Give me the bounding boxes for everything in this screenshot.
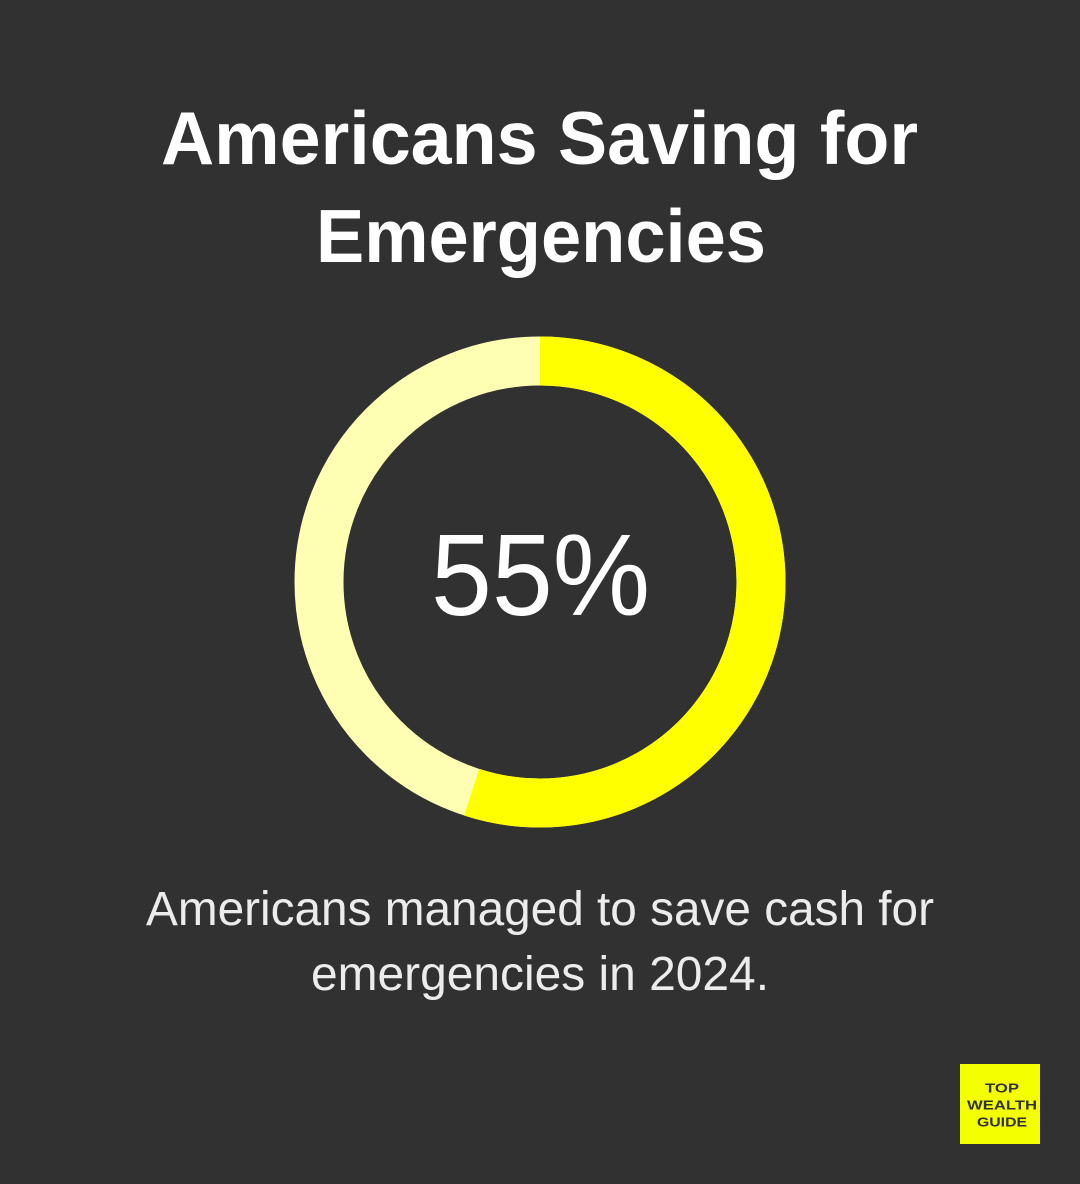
caption bbox=[146, 883, 934, 1001]
donut chart: 55 percent bbox=[319, 361, 761, 803]
title: Americans Saving for bbox=[161, 96, 918, 180]
caption: emergencies in 2024. bbox=[311, 948, 769, 1001]
logo badge: GUIDE bbox=[977, 1116, 1027, 1130]
logo badge: TOP bbox=[985, 1082, 1019, 1096]
caption: Americans managed to save cash for bbox=[146, 883, 934, 936]
title bbox=[161, 96, 918, 278]
logo badge bbox=[960, 1064, 1040, 1144]
logo badge: WEALTH bbox=[967, 1098, 1037, 1112]
donut value: 55% bbox=[431, 510, 650, 640]
title: Emergencies bbox=[316, 194, 766, 278]
